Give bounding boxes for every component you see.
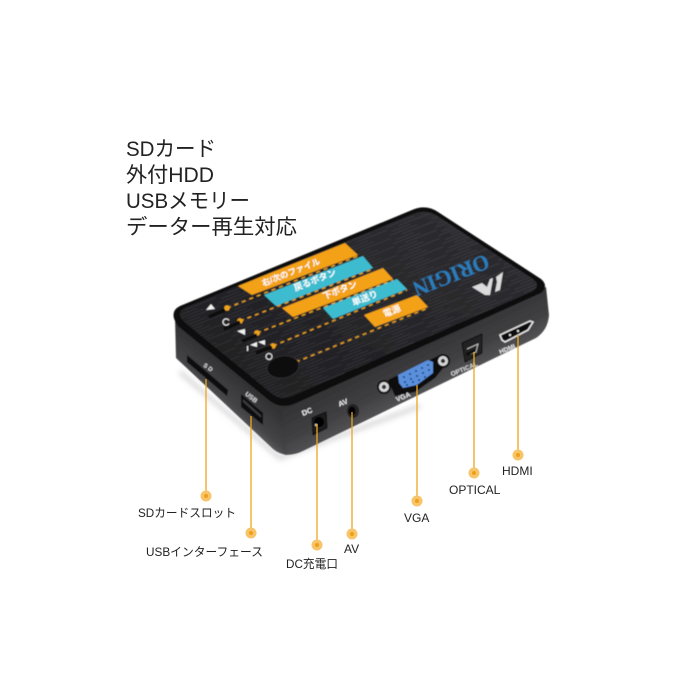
- label: next file: 右/次のファイル: [260, 256, 322, 288]
- port: HDMI: [498, 321, 533, 356]
- device body front side: [278, 287, 549, 455]
- leader: HDMI: [512, 335, 524, 460]
- label: USB interface: USBインターフェース: [146, 545, 263, 559]
- label: power: 電源: [381, 302, 402, 319]
- button labels: [224, 243, 428, 365]
- button slots: [209, 310, 272, 353]
- label: single step: [323, 279, 407, 319]
- label: SD card slot: SDカードスロット: [138, 506, 236, 520]
- port: SD card slot: S D: [202, 363, 214, 374]
- label: VGA: VGA: [404, 511, 429, 525]
- logo: ORIGIN: ORIGIN: [409, 249, 493, 302]
- port: AV: AV: [337, 397, 349, 409]
- logo: brand mark: [472, 272, 503, 295]
- callout leaders: [200, 335, 524, 550]
- device top bezel: [173, 207, 545, 406]
- label: OPTICAL: OPTICAL: [449, 483, 501, 497]
- port: AV: [337, 397, 359, 418]
- port: SD card slot: [187, 355, 228, 396]
- leader: VGA: [412, 385, 422, 506]
- port: VGA: VGA: [395, 392, 412, 404]
- leader: OPTICAL: [468, 352, 480, 478]
- button glyphs: [206, 304, 301, 381]
- power button: [265, 353, 301, 381]
- dotted leaders: [227, 256, 428, 362]
- label: back button: 戻るボタン: [292, 266, 338, 293]
- brushed top surface: [180, 212, 537, 398]
- callout labels: [138, 464, 533, 571]
- leader dots: [224, 305, 299, 365]
- label: down button: [282, 268, 393, 317]
- leader: AV: [346, 412, 358, 540]
- label: DC charging port: DC充電口: [286, 557, 338, 571]
- device shadow: [180, 372, 420, 458]
- title: [126, 137, 297, 239]
- port: DC: [300, 405, 327, 435]
- label: down button: 下ボタン: [321, 278, 358, 301]
- title: SDカード: [126, 137, 216, 161]
- port: optical: OPTICAL: [450, 361, 479, 378]
- label: single step: 単送り: [350, 288, 379, 308]
- port: USB: USB: [243, 391, 259, 405]
- port: DC: DC: [300, 405, 314, 418]
- device: [173, 207, 549, 458]
- leader: SD: [200, 379, 212, 502]
- port: optical: [450, 334, 482, 378]
- port: USB: [241, 391, 263, 425]
- button symbols: [206, 304, 272, 360]
- port: VGA: [378, 355, 449, 404]
- port: HDMI: HDMI: [498, 343, 517, 356]
- leader: DC: [312, 424, 322, 550]
- device body left side: [175, 316, 287, 455]
- title: USBメモリー: [126, 189, 250, 213]
- title: データー再生対応: [126, 215, 297, 239]
- leader: USB: [246, 416, 256, 538]
- title: 外付HDD: [126, 163, 214, 187]
- label: next file: [238, 243, 358, 295]
- label: HDMI: HDMI: [502, 464, 533, 478]
- label: back button: [264, 256, 373, 306]
- label: power: [364, 295, 428, 327]
- label: AV: AV: [344, 542, 359, 556]
